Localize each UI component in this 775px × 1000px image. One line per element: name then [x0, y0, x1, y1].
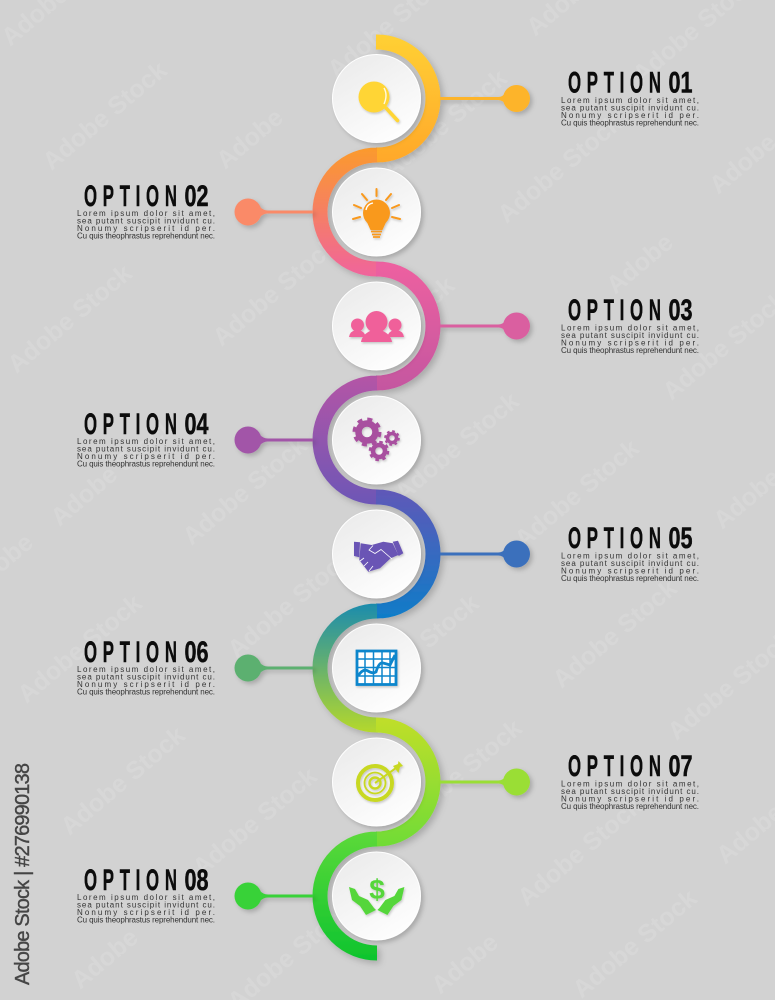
node circle 08 — [332, 852, 420, 940]
connector and dot 06 — [234, 654, 313, 682]
body text 06: Cu quis theophrastus reprehendunt nec. — [77, 688, 215, 696]
heading 07: 07 — [668, 748, 693, 783]
body text 06: Lorem ipsum dolor sit amet, — [77, 665, 215, 674]
watermarks: Stock — [390, 271, 460, 336]
body text 05: sea putant suscipit invidunt cu. — [561, 559, 699, 568]
body text 01: Lorem ipsum dolor sit amet, — [561, 96, 699, 105]
option 04 — [77, 396, 420, 484]
option 07 — [332, 738, 699, 826]
icon: target with arrow — [358, 761, 403, 800]
body text 04 — [77, 437, 215, 468]
connector and dot 03 — [440, 312, 530, 340]
heading 03: 03 — [668, 292, 693, 327]
heading 02: 02 — [184, 178, 209, 213]
node circle 05 — [332, 510, 420, 598]
watermarks: Adobe Stock — [37, 56, 172, 176]
body text 07 — [561, 780, 699, 811]
heading 01: 01 — [668, 65, 693, 99]
body text 05: Cu quis theophrastus reprehendunt nec. — [561, 574, 699, 583]
body text 07: Cu quis theophrastus reprehendunt nec. — [561, 802, 699, 811]
watermarks: Adobe — [211, 103, 289, 175]
heading 06: 06 — [184, 634, 209, 669]
watermarks: Adobe Stock — [55, 721, 190, 841]
body text 04: Cu quis theophrastus reprehendunt nec. — [77, 460, 215, 468]
body text 08: sea putant suscipit invidunt cu. — [77, 900, 215, 910]
watermarks: Adobe Stock — [509, 434, 644, 554]
heading 06: OPTION — [84, 636, 177, 669]
body text 02: Nonumy scripserit id per. — [77, 224, 215, 233]
body text 04: sea putant suscipit invidunt cu. — [77, 444, 215, 454]
body text 05 — [561, 552, 699, 583]
icon: team of people — [349, 311, 404, 342]
watermarks: Adobe Stock — [45, 412, 180, 532]
icon: dollar in hands — [349, 874, 404, 915]
body text 08: Lorem ipsum dolor sit amet, — [77, 893, 215, 902]
connector and dot 01 — [440, 85, 530, 112]
heading 08: OPTION — [84, 864, 177, 897]
connector and dot 04 — [234, 426, 313, 454]
watermarks: Adobe Stock — [12, 589, 147, 709]
option 05 — [332, 510, 699, 598]
icon: magnifier — [358, 82, 398, 120]
body text 06: Nonumy scripserit id per. — [77, 680, 215, 689]
node circle 01 — [332, 54, 420, 142]
body text 06: sea putant suscipit invidunt cu. — [77, 672, 215, 682]
body text 05: Lorem ipsum dolor sit amet, — [561, 552, 699, 560]
heading 05: 05 — [668, 520, 693, 555]
body text 01: Nonumy scripserit id per. — [561, 111, 699, 120]
body text 03: sea putant suscipit invidunt cu. — [561, 331, 699, 340]
option 08 — [77, 852, 420, 940]
heading 04: 04 — [184, 406, 209, 441]
node circle 03 — [332, 282, 420, 370]
body text 02 — [77, 209, 215, 240]
watermarks: Adobe Stock — [492, 109, 627, 229]
body text 08: Nonumy scripserit id per. — [77, 908, 215, 917]
body text 07: sea putant suscipit invidunt cu. — [561, 787, 699, 796]
watermarks: Adobe Stock — [512, 792, 647, 912]
heading 07: OPTION — [568, 750, 661, 783]
watermarks: Adobe Stock — [377, 64, 512, 184]
connector and dot 07 — [440, 768, 530, 796]
watermarks: Adobe Stock — [207, 232, 342, 352]
watermarks: Adobe — [426, 928, 504, 1000]
body text 02: sea putant suscipit invidunt cu. — [77, 216, 215, 226]
body text 04: Lorem ipsum dolor sit amet, — [77, 437, 215, 446]
icon: handshake — [354, 541, 403, 572]
option 02 — [77, 168, 420, 256]
body text 04: Nonumy scripserit id per. — [77, 452, 215, 461]
node circle 02 — [332, 168, 420, 256]
body text 06 — [77, 665, 215, 696]
body text 01 — [561, 96, 699, 128]
heading 02: OPTION — [84, 180, 177, 213]
icon: line chart on grid — [357, 651, 396, 684]
node circle 06 — [332, 624, 420, 712]
heading 04: OPTION — [84, 408, 177, 441]
body text 07: Nonumy scripserit id per. — [561, 794, 699, 804]
body text 07: Lorem ipsum dolor sit amet, — [561, 780, 699, 788]
heading 01: OPTION — [568, 67, 661, 100]
watermarks: Adobe — [66, 923, 144, 995]
option 03 — [332, 282, 699, 370]
body text 02: Lorem ipsum dolor sit amet, — [77, 209, 215, 218]
watermarks: Adobe Stock — [2, 259, 137, 379]
body text 03: Nonumy scripserit id per. — [561, 338, 699, 348]
heading 08: 08 — [184, 862, 209, 897]
watermarks: Adobe Stock — [547, 574, 682, 694]
body text 01: Cu quis theophrastus reprehendunt nec. — [561, 118, 699, 128]
node circle 07 — [332, 738, 420, 826]
body text 03: Cu quis theophrastus reprehendunt nec. — [561, 346, 699, 355]
icon: light bulb — [353, 189, 400, 237]
body text 01: sea putant suscipit invidunt cu. — [561, 104, 699, 112]
watermarks: Adobe Stock — [349, 589, 484, 709]
watermarks: Adobe Stock — [222, 544, 357, 664]
icon: gears — [354, 420, 399, 460]
watermarks: Adobe Stock — [389, 387, 524, 507]
connector and dot 08 — [234, 882, 313, 910]
option 06 — [77, 624, 420, 712]
body text 03: Lorem ipsum dolor sit amet, — [561, 324, 699, 332]
watermarks: Adobe Stock — [187, 762, 322, 882]
icon: dollar in hands: $ — [369, 874, 385, 905]
watermarks: Adobe Stock — [392, 714, 527, 834]
heading 03: OPTION — [568, 294, 661, 327]
body text 02: Cu quis theophrastus reprehendunt nec. — [77, 232, 215, 240]
watermarks: Adobe Stock — [177, 431, 312, 551]
body text 08: Cu quis theophrastus reprehendunt nec. — [77, 916, 215, 924]
connector and dot 02 — [234, 198, 313, 226]
body text 03 — [561, 324, 699, 355]
connector and dot 05 — [440, 540, 530, 568]
body text 05: Nonumy scripserit id per. — [561, 566, 699, 576]
watermarks: Adobe — [601, 228, 679, 300]
body text 08 — [77, 893, 215, 924]
option 01 — [332, 54, 699, 142]
vertical stock credit: Adobe Stock | #276990138 — [12, 763, 34, 985]
heading 05: OPTION — [568, 522, 661, 555]
winding gradient ribbon — [320, 42, 433, 953]
node circle 04 — [332, 396, 420, 484]
